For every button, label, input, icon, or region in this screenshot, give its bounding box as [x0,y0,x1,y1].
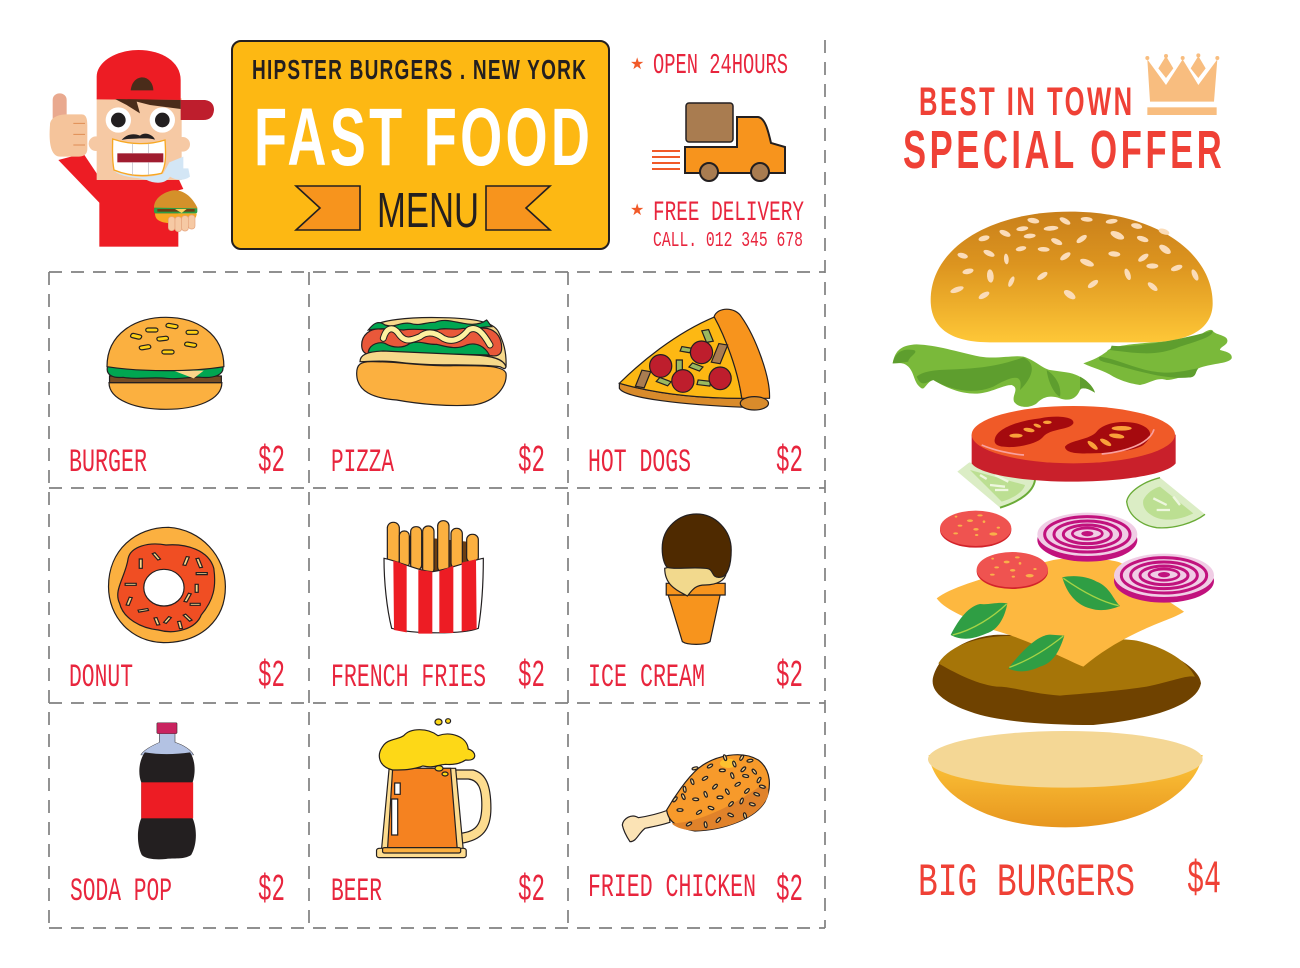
open hours text: OPEN 24HOURS [653,49,788,82]
icon: crown [1145,53,1219,115]
lettuce leaves [893,330,1232,407]
cheese slice [937,558,1184,667]
icon: french fries [384,521,483,634]
panel: title sign [232,41,609,249]
label: BURGER [69,444,147,481]
basil leaves [951,576,1120,671]
icon: mascot character with burger [50,50,214,247]
price: $2 [518,440,545,483]
icon: ice cream cone [662,514,731,644]
label: HOT DOGS [588,444,691,481]
label: FRENCH FRIES [331,659,486,696]
cucumber slices [957,462,1205,528]
price: $2 [258,440,285,483]
special offer text: SPECIAL OFFER [903,119,1222,180]
label: DONUT [69,659,133,696]
menu item: hot dogs label with pizza icon [588,309,803,483]
icon: star: ★ [630,202,644,219]
icon: donut [109,527,225,643]
icon: pizza slice [619,309,770,410]
price: $2 [776,440,803,483]
icon: soda bottle [138,723,196,859]
price: $2 [518,655,545,698]
onion rings [1037,513,1214,603]
restaurant name: HIPSTER BURGERS . NEW YORK [252,54,586,86]
big burgers price: $4 [1187,854,1221,906]
big burgers label: BIG BURGERS [918,857,1135,909]
main title: FAST FOOD [254,91,590,183]
icon: hot dog [357,317,506,406]
menu item: pizza label with hot dog icon [331,317,545,483]
menu item: burger [69,317,285,483]
bottom bun [928,731,1203,827]
icon: chicken drumstick [622,754,769,842]
menu word: MENU [377,184,479,238]
best in town text: BEST IN TOWN [919,80,1132,125]
price: $2 [776,655,803,698]
menu item: beer [331,719,545,912]
menu item: ice cream [588,514,803,698]
menu item: fried chicken [588,754,803,912]
label: SODA POP [70,873,172,910]
top bun with sesame seeds [931,212,1213,342]
tomato slice [972,406,1176,482]
menu item: soda pop [70,723,285,912]
beef patty [933,635,1201,725]
icon: star: ★ [630,56,644,73]
panel: opening hours and delivery [630,49,804,253]
dashed menu grid [49,40,825,928]
price: $2 [258,655,285,698]
price: $2 [776,869,803,912]
label: ICE CREAM [588,659,705,696]
menu item: donut [69,527,285,698]
label: BEER [331,873,382,910]
price: $2 [258,869,285,912]
menu item: french fries [331,521,545,698]
icon: delivery truck [652,103,785,181]
salami slices [940,511,1048,589]
panel: exploded big burger [893,212,1232,827]
icon: burger [107,317,224,409]
free delivery text: FREE DELIVERY [653,198,804,229]
label: PIZZA [331,444,395,481]
icon: beer mug [377,719,491,858]
panel: special offer heading [903,53,1222,180]
phone number: CALL. 012 345 678 [653,230,803,253]
ribbon left [296,186,360,230]
label: FRIED CHICKEN [588,869,756,906]
price: $2 [518,869,545,912]
ribbon right [486,186,550,230]
cheese, salami, onion and patty layers [928,511,1214,827]
